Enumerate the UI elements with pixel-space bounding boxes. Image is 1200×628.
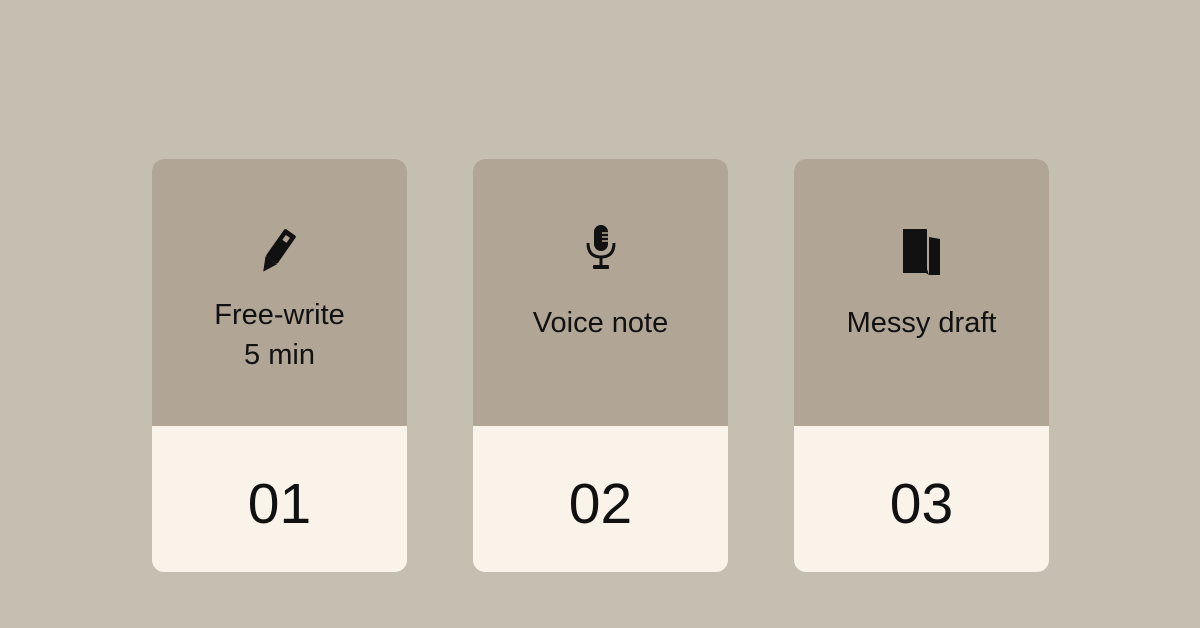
icon: documents <box>903 229 940 275</box>
label: Voice note <box>533 307 668 339</box>
card: voice note <box>473 159 728 572</box>
icon: microphone <box>586 225 616 269</box>
number: 01 <box>248 472 311 536</box>
label <box>214 299 345 371</box>
card top panel <box>152 159 407 426</box>
icon: pencil <box>263 229 296 272</box>
card top panel <box>794 159 1049 426</box>
label: Free-write <box>214 299 345 331</box>
number: 03 <box>890 472 953 536</box>
label: 5 min <box>244 339 315 371</box>
number: 02 <box>569 472 632 536</box>
card top panel <box>473 159 728 426</box>
card: free-write <box>152 159 407 572</box>
label: Messy draft <box>847 307 996 339</box>
card: messy draft <box>794 159 1049 572</box>
